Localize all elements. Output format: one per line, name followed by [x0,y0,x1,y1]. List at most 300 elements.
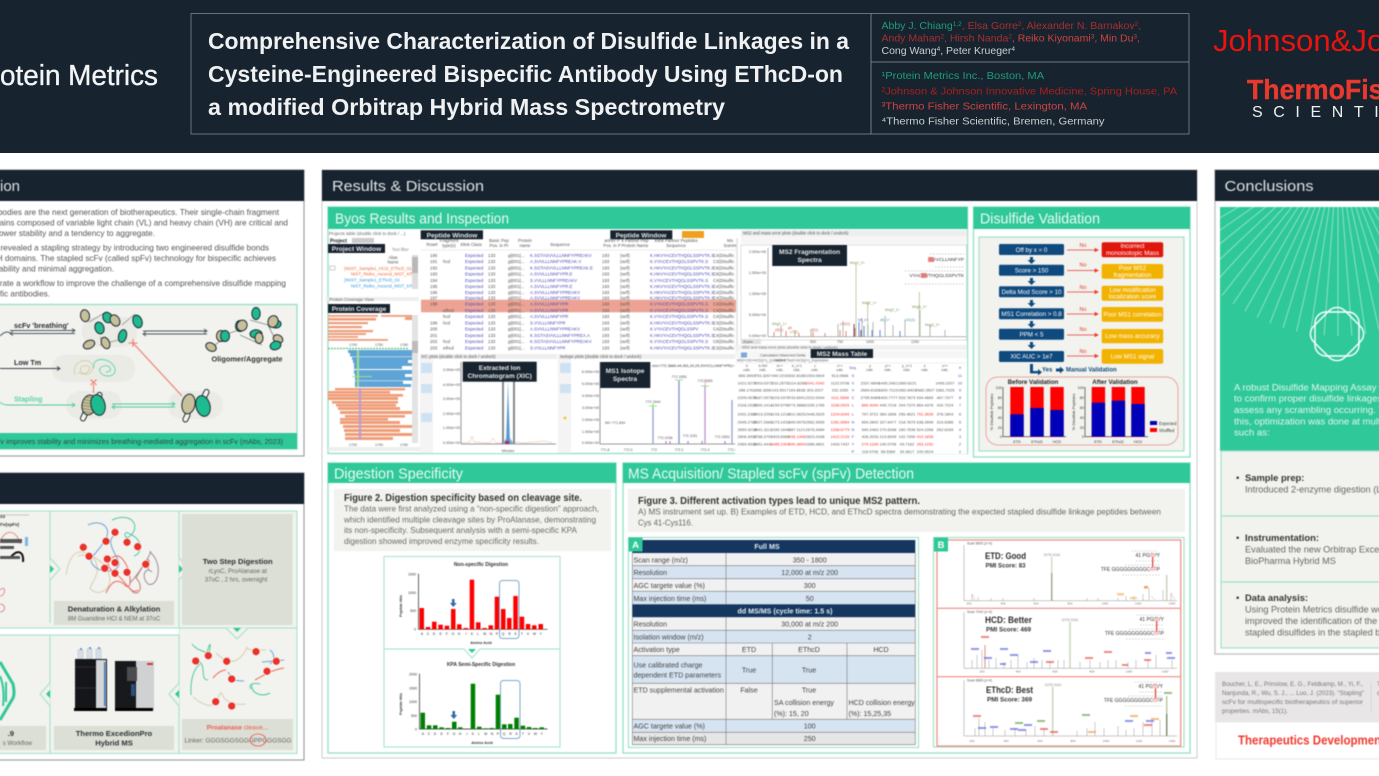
table: peptide window: C3(Disulfic [713,346,735,350]
spectrum: EThcD: 1200 [1136,739,1143,743]
spectrum: EThcD: 400 [1003,739,1009,743]
table: MS2 mass table: 2335.1785 [806,403,825,408]
bar chart: non-specific digestion: 1500 [408,572,416,576]
table: peptide window: gi|001|... [508,320,525,325]
table: peptide window: 133 [488,314,496,319]
table: MS2 mass table: # [959,366,961,370]
table: MS settings: 50 [806,595,814,603]
takeaway: instrumentation: • [1236,533,1239,544]
table: peptide window: A.SVVLLLNNFYPR [530,314,568,319]
step: antibody structure (clipped): Fv(spFv) [0,522,20,527]
table: peptide window: Pos. in P [603,243,621,248]
table: peptide window: gi|001|... [508,290,525,295]
spectrum: HCD: 1200 [1162,670,1169,674]
table: peptide window: K.HKVYACEVTHQGLSSPVTK.S [650,296,714,301]
table: MS2 mass table: c [814,364,816,368]
table: peptide window: 201 [430,333,438,338]
table: MS2 mass table: 39.3617 [900,449,915,454]
table: MS2 mass table: calc. [941,368,949,372]
title box [191,14,1189,134]
chart: MS2 fragmentation spectra: MS2 and mass error plots (double click to dock / undock) [743,230,849,236]
table: MS2 mass table: 2682.3507 [916,388,935,393]
table: MS2 mass table: 2951.4430 [754,442,773,447]
stapled scFv [80,389,212,423]
charts: before and after: 0 [1000,435,1002,439]
table: MS2 mass table: 3 [959,434,962,439]
chart: MS2 fragmentation spectra: Mxg2_1+ [772,322,787,326]
chart: MS2 fragmentation spectra: 0.000e+00 [749,334,766,338]
table: peptide window: 193 [430,272,438,277]
table: MS2 mass table: 733.6941 [789,395,806,400]
validation flowchart: XIC AUC > 1e7 [1010,354,1053,361]
charts: before and after: HCD [1134,440,1142,444]
chart: MS1 isotope spectra: 771.8 [600,448,610,452]
table: peptide window: C4(Disulfic [713,302,735,307]
table: peptide window: (self) [620,314,630,319]
table: MS2 mass table: 524.2266 [917,427,934,432]
table: MS2 mass table: N [852,427,855,432]
label: MS2 spectra: MS2 Fragmentation [779,249,840,256]
bar chart: KPA digestion: M [484,732,487,736]
chart: protein coverage [328,304,420,451]
chart: MS1 isotope spectra: 772 [651,448,657,452]
label: MS2 mass table [811,349,873,358]
table: MS2 mass table: 2641.3113 [754,427,773,432]
figure 2 caption: The data were first analyzed using a “non-specific digestion” approach, [344,504,599,514]
table: peptide window: C4(Disulfic [713,308,735,313]
bar chart: KPA digestion: 2000 [409,672,417,676]
sub-panel: digestion specificity [328,463,616,753]
table: peptide window: 133 [488,284,496,289]
panel: conclusions [1214,168,1379,656]
badge A [628,538,642,552]
table: MS settings: Resolution [634,569,667,577]
table: MS2 mass table: C [852,395,855,400]
chart: MS1 isotope spectra: 772.1655 [672,375,686,379]
table: peptide window: Expected [465,333,484,338]
bar chart: KPA digestion: N [491,732,494,736]
table: peptide window: hcd [443,320,451,325]
mini sequence map: SVVCLLNNFYP [929,257,964,263]
chart: MS1 isotope spectra: 772.2 [674,448,684,452]
table: peptide window: A.SVVLLLNNFYPR.E [530,272,573,277]
spectrum: ETD: 1000 [1102,602,1109,606]
table: MS2 mass table: 1560.6221 [898,380,917,385]
spectrum: HCD: 1078.3181 [1062,618,1078,622]
spectrum: ETD: 1200 [1135,602,1142,606]
references: properties. mAbs, 15(1). [1222,708,1288,715]
label: oligomer: Oligomer/Aggregate [211,354,283,364]
table: MS2 mass table: 2 [959,442,962,447]
table: MS2 mass table: 1403.6988 [771,434,790,439]
table: peptide window: 192 [430,265,438,270]
table: peptide window: K.HKVYACEVTHQGLSSPVTK.S [650,253,714,258]
validation flowchart: Low modification [1109,287,1156,294]
table: MS2 mass table: b [746,364,748,368]
chart: protein coverage: 1780 [400,343,408,347]
step: antibody structure (clipped): 03 [0,514,6,519]
table: peptide window: Expected [465,253,484,258]
spectrum: ETD: 1400 [1169,602,1176,606]
table: MS2 mass table: 152.1050 [832,388,849,393]
affiliations: ¹Protein Metrics Inc., Boston, MA [882,70,1044,82]
validation flowchart: Off by x = 0 [1016,247,1048,254]
spectrum: HCD: Scan 7042 (z=4) [967,610,992,614]
bar chart: KPA digestion: A [422,732,425,736]
table: MS2 mass table: 213.6049 [880,434,897,439]
table: peptide window: 133 [488,290,496,295]
charts: before and after: 60 [1080,406,1084,410]
table: MS2 mass table: 2222.0944 [806,395,825,400]
figure 2 caption [334,489,611,551]
heading: Byos: Byos Results and Inspection [335,210,509,228]
validation flowchart: Score > 150 [1015,268,1049,274]
aggregate cluster [204,308,284,353]
table: MS2 mass table: 2795.5480 [861,395,880,400]
chart: extracted ion chromatogram: 0.000e+00 [443,441,460,445]
yes and manual validation: Yes [1042,368,1053,374]
table: MS2 mass table: 2823.4168 [806,434,825,439]
figure: scFv stapling diagram [0,304,297,449]
table: peptide window: (self) [620,265,630,270]
table: MS2 mass table: 1400.7777 [879,395,898,400]
table: MS2 mass table: 319.6386 [937,419,954,424]
spectrum: HCD: 200 [979,670,985,674]
chart: MS2 fragmentation spectra: 2.000e+05 [749,250,766,254]
table: MS2 mass table: 1053.0604 [806,373,825,378]
table: MS2 mass table: 990.4894 [789,442,806,447]
charts: before and after: 0 [1082,435,1084,439]
table: MS2 mass table: 1330.1646 [771,427,790,432]
table: MS settings: SA collision energy [774,699,834,707]
table: MS2 mass table: 1224.6349 [831,412,850,417]
spectrum: EThcD: 1078.3181 [1044,683,1062,687]
table: peptide window: 202 [430,339,438,344]
table: peptide window [421,230,738,353]
table: MS2 mass table: 832.8188 [789,373,806,378]
badge B [934,538,948,552]
chart: MS1 isotope spectra: 6.000e+05 [582,370,599,374]
bar chart: non-specific digestion: R [508,632,511,636]
table: peptide window: Expected [465,339,484,344]
table: MS2 mass table: 1111.5508 [831,395,850,400]
bar chart: non-specific digestion: Q [502,632,505,636]
validation flowchart: localization score [1109,294,1157,300]
spectrum: HCD: 1000 [1126,670,1133,674]
table: peptide window: C4(Disulfic [713,278,735,283]
charts: before and after: Before Validation [1008,379,1058,386]
spectrum: ETD: 800 [1067,602,1073,606]
window: project: (INIST_Sample1_HCD_EThcD_01 [344,266,412,271]
table: MS2 mass table: 1159.5796 [771,403,790,408]
table: MS2 mass table: 638.2695 [917,419,934,424]
bar chart: non-specific digestion: 1000 [408,591,416,595]
table: peptide window: Expected [465,265,484,270]
table: peptide window: Sequence [666,243,686,248]
table: peptide window: A.SVVLLLNNFYPR [530,308,568,313]
step: software workflow: .9 [8,729,14,738]
spectrum: HCD: 41 PGCVY [1140,617,1165,623]
table: MS settings: False [740,686,758,694]
validation flowchart: MS1 Correlation > 0.8 [1001,311,1062,318]
table: peptide window: 193 [602,265,610,270]
table: MS2 mass table: calc. [921,368,929,372]
bar chart: KPA digestion: T [522,732,525,736]
table: peptide window: C4(Disulfic [713,327,735,332]
table: peptide window: gi|001|... [508,314,525,319]
table: MS settings: 350 - 1800 [793,556,827,564]
table: peptide window: K.HKVYACEVTHQGLSSPVTK.S [650,346,714,350]
table: peptide window: A.SVVLLLNNFYPREAKV [530,290,580,295]
takeaway: sample prep: • [1236,473,1239,484]
intro text: revealed a stapling strategy by introducing two engineered disulfide bonds [0,244,269,252]
table: peptide window: K.HKVYACEVTHQGLSSPVTK.S [650,265,714,270]
table: peptide window: gi|001|... [508,327,525,332]
table: peptide window: K.SGTASVVLLLNNFYPREA.A [530,333,590,338]
references [1215,672,1379,722]
table: MS2 mass table: 1216.1216 [771,412,790,417]
table: MS2 mass table: 2318.1519 [738,403,757,408]
checks [999,244,1064,362]
table: peptide window: 193 [602,259,610,264]
label: MS1 isotope: MS1 Isotope [606,368,645,375]
authors: , Alexander N. Barnakov [1021,20,1135,32]
table: MS2 mass table: 2669.6160 [861,388,880,393]
table: MS2 mass table: 11 [958,373,963,378]
authors: 3 [1091,34,1095,40]
takeaway: data analysis: improved the identification of the [1245,616,1377,626]
charts: before and after: 40 [1080,416,1084,420]
window: project: Projects table (double click to dock / ...) [329,231,406,236]
figure 3 caption: Cys 41-Cys116. [638,518,693,528]
table: peptide window: S.VVLLLNNFYPR [530,346,565,350]
chart: MS1 isotope spectra: 772.4 [700,448,710,452]
mini sequence map [905,254,965,284]
table: MS2 mass table: 327.6477 [880,419,897,424]
table: peptide window: K.VYACEVTHQGLSSPVTK.S [650,314,708,319]
step: two step digestion [182,514,292,625]
table: MS2 mass table: 2788.3797 [754,434,773,439]
table: peptide window: A.SVVLLLNNFYPR.E [530,284,573,289]
bar chart: KPA digestion: Amino Acid [471,740,493,745]
table: MS2 mass table: 1 [959,449,962,454]
unfolded tangles [75,360,115,376]
authors: 4 [937,46,941,53]
table: peptide window: 203 [430,346,438,350]
takeaway: instrumentation: BioPharma Hybrid MS [1245,556,1336,566]
chart: extracted ion chromatogram: 3.000e+05 [443,397,460,401]
label: MS2 mass table: MS2 Mass Table [817,351,868,358]
table: peptide window: Mo [727,238,734,243]
spectrum: HCD: 800 [1089,670,1095,674]
table: peptide window: hcd [443,259,451,264]
spectrum: ETD: PMI Score: 83 [986,562,1026,570]
table: MS2 mass table: 143.5917 [772,388,789,393]
table: MS2 mass table: 2806.3902 [738,434,757,439]
table: peptide window: C8(Disulfic [713,339,735,344]
figure 2 charts [384,556,560,747]
table: MS2 mass table: 1493.7437 [831,442,850,447]
chart: MS2 fragmentation spectra: c8(1) [810,328,818,332]
figure 3 caption [628,489,1185,532]
table: MS settings: Max injection time (ms) [634,735,706,743]
table: MS2 mass table: F [852,434,855,439]
spectrum: EThcD: PMI Score: 369 [987,696,1033,704]
bar chart: non-specific digestion: L [477,632,479,636]
chart: MS2 fragmentation spectra: y6 [788,326,792,330]
table: peptide window: K.HKVYACEVTHQGLSSPVTK.S [650,272,714,277]
table: peptide window: A.SVVLLLNNFYPREAKV [530,296,580,301]
table: peptide window: (self) [620,284,630,289]
bar chart: non-specific digestion: D [433,632,436,636]
table: MS2 mass table: 263.1152 [917,442,934,447]
charts: before and after: 100 [996,386,1002,390]
table: peptide window: Pos. in Pr [489,243,509,248]
chart: MS1 isotope spectra: M0~771.894 [605,421,625,425]
table: peptide window: (self) [620,327,630,332]
table: peptide window: K.VYACEVTHQGLSSPVTK.S [650,308,708,313]
charts: before and after: % Disulfide Peptides [1071,394,1076,430]
bar chart: non-specific digestion: M [483,632,486,636]
charts: before and after: 80 [1080,396,1084,400]
authors: 1,2 [953,21,962,28]
table: peptide window: Expected [465,320,484,325]
authors: 2 [1008,34,1012,40]
table: peptide window: hcd [443,314,451,319]
table: MS2 mass table: 751.3535 [917,412,934,417]
table: peptide window: 197 [430,296,438,301]
authors: Andy Mahan [882,32,941,44]
table: peptide window: gi|001|... [508,339,525,344]
table: peptide window: 200 [430,327,438,332]
affiliations: ³Thermo Fisher Scientific, Lexington, MA [882,100,1087,112]
legend [1150,421,1177,433]
chart: MS1 isotope spectra: 772.1644 [646,400,660,404]
table: MS2 mass table: 384.1896 [880,412,897,417]
table: MS2 mass table: S [852,373,855,378]
table: MS2 mass table: 467.7377 [937,395,954,400]
table: MS2 mass table: b-NH [759,364,768,368]
bar chart: non-specific digestion: G [452,632,455,636]
table: MS settings: Activation type [634,646,680,654]
table: peptide window: A.SVVLLLNNFYPR [530,302,568,307]
logo: Thermo Fisher Scientific [1247,74,1379,121]
table: MS settings: AGC targete value (%) [634,722,705,730]
charts: before and after: ETD [1013,440,1021,444]
label: MS2 spectra: Spectra [797,257,822,264]
takeaway: sample prep: Sample prep: [1245,472,1304,483]
label: protein coverage [328,304,390,313]
arrows: scFv breathing [0,328,207,336]
table: peptide window: C4(Disulfic [713,333,735,338]
table: MS2 mass table: 811.0825 [789,412,806,417]
authors: , [1137,32,1140,44]
table: MS2 mass table: 58.5389 [881,449,896,454]
charts: before and after: 80 [998,396,1002,400]
authors: , Peter Krueger [940,45,1012,57]
spectrum: EThcD [964,678,1177,743]
table: peptide window: (self) [620,346,630,350]
chart: MS1 isotope spectra: 5.000e+05 [582,382,599,386]
chart: MS2 fragmentation spectra: c7(1) [790,330,798,334]
charts: before and after: 60 [998,406,1002,410]
table: peptide window: (self) [620,296,630,301]
table: MS2 mass table: 860.3993 [739,373,756,378]
table: MS2 mass table: 849.0976 [789,419,806,424]
label: project window: Project Window [332,246,382,253]
step: software workflow: s Workflow [3,741,33,747]
chart: MS2 fragmentation spectra: y5(1) [775,328,783,332]
table: peptide window: K.HKVYACEVTHQGLSSPVTK.S [650,284,714,289]
table: peptide window: 193 [602,320,610,325]
charts: before and after: 20 [1080,426,1084,430]
table: MS2 mass table: 410.1836 [917,434,934,439]
table: MS settings: ETD [742,646,756,654]
bar chart: KPA digestion: P [497,732,500,736]
charts: before and after: % Disulfide Peptides [989,394,994,430]
table: peptide window: 193 [602,302,610,307]
label: Thermo ExcedionPro [54,726,174,750]
table: peptide window: K.SGTASVVLLLNNFYPREAKV [530,253,592,258]
table: MS2 mass table: 2431.2360 [738,412,757,417]
table: MS2 mass table: 1122.5706 [831,380,850,385]
bar chart: non-specific digestion: F [446,632,449,636]
table: peptide window: K.VYACEVTHQGLSSPVTK.S [650,278,708,283]
bar chart: KPA digestion: V [528,732,531,736]
label: MS1 isotope: Spectra [613,376,637,383]
authors: 2 [1018,21,1022,28]
table: MS2 mass table: calc. [776,368,784,372]
table: MS settings: AGC targete value (%) [634,582,705,590]
table: MS settings: Use calibrated charge [634,662,703,670]
charts: before and after: EThcD [1112,440,1124,444]
label: peptide window 2: Peptide Window [616,232,667,239]
table: peptide window: Expected [465,259,484,264]
bar chart: KPA digestion: D [434,732,437,736]
table: peptide window: 133 [488,320,496,325]
bar chart: non-specific digestion: K [471,632,474,636]
table: MS settings: Full MS [754,543,780,551]
bar chart: non-specific digestion: 0 [414,628,416,632]
table: MS2 mass table: 256.4621 [899,412,916,417]
table: MS2 mass table: 1168.0929 [831,403,850,408]
bar chart: non-specific digestion [399,562,548,645]
table: MS2 mass table: 1581.7025 [936,388,955,393]
icon: knot [1306,303,1368,365]
table: MS2 mass table: 445.7218 [880,403,897,408]
table: peptide window: 193 [602,308,610,313]
chart: MS1 isotope spectra: 772.0 [624,448,632,452]
sub-panel: Byos results [326,207,968,454]
label: denaturation [54,601,174,625]
validation flowchart: No [1080,349,1086,355]
table: MS2 mass table: 7 [959,403,962,408]
mini sequence map: VYACEVTHQGLSSPVTK [909,273,965,279]
label: XIC: Extracted Ion [479,365,521,372]
chart: protein coverage: 1780 [400,443,408,447]
table: peptide window: K.SGTASVVLLLNNFYPREAK.E [530,265,593,270]
table: MS2 mass table: 2300.1414 [754,403,773,408]
table: peptide window: 191 [430,259,438,264]
table: peptide window: k Partner Pep [622,238,649,243]
table: MS settings: Max injection time (ms) [634,595,706,603]
window: project: NIST_Reiko_Ascend_NIST_KP_T [351,284,418,288]
table: peptide window: Expected [465,284,484,289]
step: denaturation tangle: Denaturation & Alkylation [68,604,161,614]
chart: MS2 fragmentation spectra: Mxg2_1+ [862,301,877,305]
bar chart: non-specific digestion: N [490,632,493,636]
table: MS2 mass table: 1495.2461 [879,380,898,385]
